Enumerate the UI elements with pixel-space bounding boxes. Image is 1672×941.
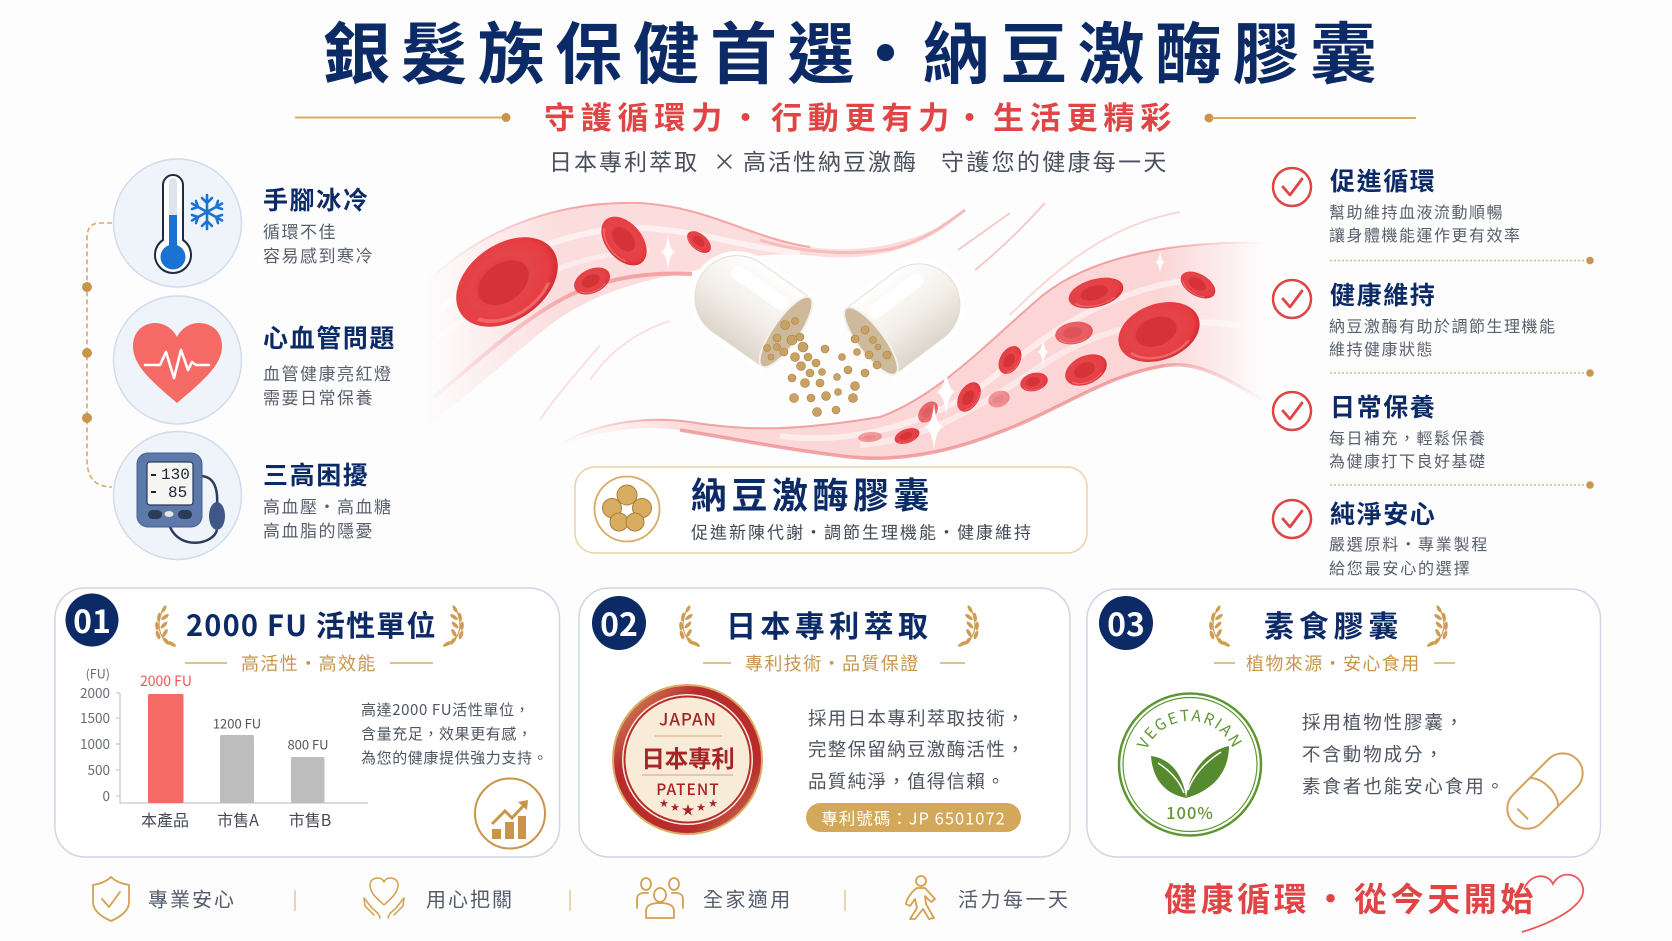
bar chart: 本產品 — [141, 807, 189, 831]
icon: people — [637, 878, 683, 918]
stars — [659, 796, 718, 818]
laurels — [1209, 605, 1448, 648]
vegetarian seal — [1118, 692, 1262, 837]
tagline: 高活性納豆激酶 — [743, 143, 918, 177]
bar chart: 0 — [102, 785, 110, 805]
number badge — [66, 594, 118, 646]
icon: blood pressure monitor: 85 — [168, 484, 187, 502]
title: 納豆激酶膠囊 — [923, 0, 1387, 98]
icon: thermometer and snowflake — [114, 159, 242, 287]
description: 給您最安心的選擇 — [1329, 555, 1471, 579]
heading: 心血管問題 — [263, 319, 396, 355]
benefit 1 — [1273, 162, 1522, 246]
panel 01: 2000 FU — [55, 588, 560, 857]
description: 完整保留納豆激酶活性， — [808, 736, 1026, 762]
description: 高血脂的隱憂 — [263, 516, 374, 542]
subheading: 植物來源·安心食用 — [1246, 650, 1421, 676]
description: 採用日本專利萃取技術， — [808, 705, 1026, 731]
bar chart: 2000 — [80, 682, 110, 702]
benefit 2 — [1273, 276, 1557, 360]
footer badge: family — [637, 878, 793, 918]
bar chart: 1500 — [80, 707, 110, 727]
bar chart: 500 — [88, 759, 110, 779]
patent seal: 日本專利 — [641, 740, 735, 774]
subtitle decoration: left line — [295, 113, 510, 122]
stars: ★ — [681, 800, 695, 818]
symptom 3: three highs — [114, 432, 392, 560]
right benefits list — [1273, 162, 1594, 579]
upper blood vessel — [420, 203, 1180, 430]
description: 容易感到寒冷 — [263, 242, 374, 266]
heading: 2000 FU 活性單位 — [186, 603, 437, 645]
red slogan: 守護循環力 — [544, 92, 728, 138]
description: 品質純淨，值得信賴。 — [808, 768, 1006, 794]
footer badge: vitality — [906, 876, 1070, 919]
bar chart: 1200 FU — [213, 714, 261, 732]
tagline: 守護您的健康每一天 — [941, 143, 1169, 177]
footer badge: care — [364, 878, 514, 918]
description: 幫助維持血液流動順暢 — [1329, 199, 1504, 223]
panel 03: vegetarian capsule — [1086, 588, 1602, 858]
title: · — [852, 0, 929, 98]
heading: 三高困擾 — [263, 456, 369, 492]
bar chart: 2000 FU — [140, 671, 192, 691]
subheading: 高活性·高效能 — [241, 650, 377, 676]
patent seal: JAPAN — [659, 706, 717, 730]
heading: 健康維持 — [1330, 276, 1436, 312]
icon: heart with pulse — [114, 296, 242, 424]
number badge — [592, 596, 646, 650]
heading: 日常保養 — [1330, 388, 1436, 424]
number badge: 02 — [600, 600, 638, 646]
description: 為您的健康提供強力支持。 — [361, 746, 548, 768]
description: 為健康打下良好基礎 — [1329, 448, 1487, 472]
heading: 促進循環 — [1330, 162, 1436, 198]
icon: rising chart — [475, 778, 545, 848]
red slogan: · — [730, 92, 767, 138]
tagline: 日本專利萃取 — [549, 143, 699, 177]
icon: check — [1273, 280, 1311, 318]
closing slogan — [1164, 873, 1583, 932]
sparkles — [661, 234, 1165, 451]
red slogan: 生活更精彩 — [993, 92, 1177, 138]
subtitle decoration: right line — [1204, 114, 1416, 122]
label: 活力每一天 — [958, 884, 1070, 912]
heading: 納豆激酶膠囊 — [691, 467, 934, 519]
red slogan: 行動更有力 — [771, 92, 955, 138]
product label box — [575, 467, 1087, 553]
description: 促進新陳代謝·調節生理機能·健康維持 — [691, 518, 1033, 544]
heading: 素食膠囊 — [1264, 602, 1403, 646]
title: 銀髮族保健首選 — [323, 0, 865, 98]
closing slogan: 從今天開始 — [1354, 873, 1537, 921]
description: 維持健康狀態 — [1329, 336, 1434, 360]
description: 需要日常保養 — [263, 384, 374, 408]
label: 用心把關 — [426, 884, 514, 912]
icon: heart and hands — [364, 878, 404, 918]
subheading: 專利技術·品質保證 — [745, 650, 920, 676]
benefit 3 — [1273, 388, 1487, 472]
label: 專業安心 — [148, 884, 236, 912]
bar chart: 市售A — [217, 807, 259, 831]
description: 嚴選原料·專業製程 — [1329, 531, 1489, 555]
icon: capsule outline — [1499, 745, 1591, 837]
left symptom connector — [82, 223, 112, 487]
label: 全家適用 — [703, 884, 793, 912]
description: 不含動物成分， — [1302, 741, 1445, 767]
tagline: × — [713, 143, 738, 177]
heading: 日本專利萃取 — [726, 602, 932, 646]
description: 每日補充，輕鬆保養 — [1329, 425, 1487, 449]
number badge: 03 — [1107, 600, 1145, 646]
footer badge: professional — [93, 877, 236, 921]
panel 02: Japan patent — [579, 588, 1070, 857]
description: 循環不佳 — [263, 218, 337, 242]
number badge — [1099, 596, 1153, 650]
patent seal — [613, 685, 762, 834]
icon: red heart outline — [1522, 875, 1583, 932]
description: 高血壓·高血糖 — [263, 492, 392, 518]
laurels — [155, 605, 464, 648]
description: 含量充足，效果更有感， — [361, 722, 533, 744]
closing slogan: 健康循環 — [1164, 873, 1310, 921]
number badge: 01 — [73, 597, 111, 643]
stars: ★ — [708, 796, 718, 810]
closing slogan: · — [1314, 873, 1351, 921]
icon: check — [1273, 500, 1311, 538]
right capsule half — [836, 247, 976, 382]
description: 納豆激酶有助於調節生理機能 — [1329, 313, 1557, 337]
red slogan: · — [954, 92, 991, 138]
icon: check — [1273, 168, 1311, 206]
laurels — [679, 605, 979, 648]
stars: ★ — [659, 796, 669, 810]
symptom 1: cold hands and feet — [114, 159, 374, 287]
description: 高達2000 FU活性單位， — [361, 698, 530, 720]
bar chart — [80, 664, 368, 831]
stars: ★ — [670, 800, 680, 814]
description: 血管健康亮紅燈 — [263, 360, 392, 384]
symptom 2: cardiovascular — [114, 296, 396, 424]
icon: blood pressure monitor — [114, 432, 242, 560]
bar chart: 800 FU — [287, 734, 329, 754]
natto beans — [764, 318, 891, 416]
icon: check — [1273, 392, 1311, 430]
patent number badge: 專利號碼：JP 6501072 — [821, 806, 1006, 830]
bar chart: (FU) — [86, 664, 110, 682]
bar chart: 1000 — [80, 733, 110, 753]
red blood cells — [439, 208, 1220, 447]
illustration: blood vessels with capsule — [420, 203, 1270, 458]
benefit 4 — [1273, 495, 1489, 579]
icon: natto beans — [594, 476, 660, 542]
description: 採用植物性膠囊， — [1302, 709, 1465, 735]
description: 讓身體機能運作更有效率 — [1329, 222, 1522, 246]
icon: shield — [93, 877, 129, 921]
stars: ★ — [696, 800, 706, 814]
heading: 手腳冰冷 — [263, 181, 369, 217]
patent seal: PATENT — [656, 778, 720, 800]
icon: blood pressure monitor: 130 — [161, 466, 190, 484]
vegetarian seal: VEGETARIAN — [1136, 710, 1242, 747]
lower blood vessel — [555, 243, 1270, 458]
heading: 純淨安心 — [1330, 495, 1436, 531]
description: 素食者也能安心食用。 — [1302, 773, 1506, 799]
bar chart: 市售B — [289, 807, 331, 831]
icon: walking person — [906, 876, 935, 919]
left capsule half — [678, 239, 821, 374]
vegetarian seal: 100% — [1166, 800, 1214, 824]
